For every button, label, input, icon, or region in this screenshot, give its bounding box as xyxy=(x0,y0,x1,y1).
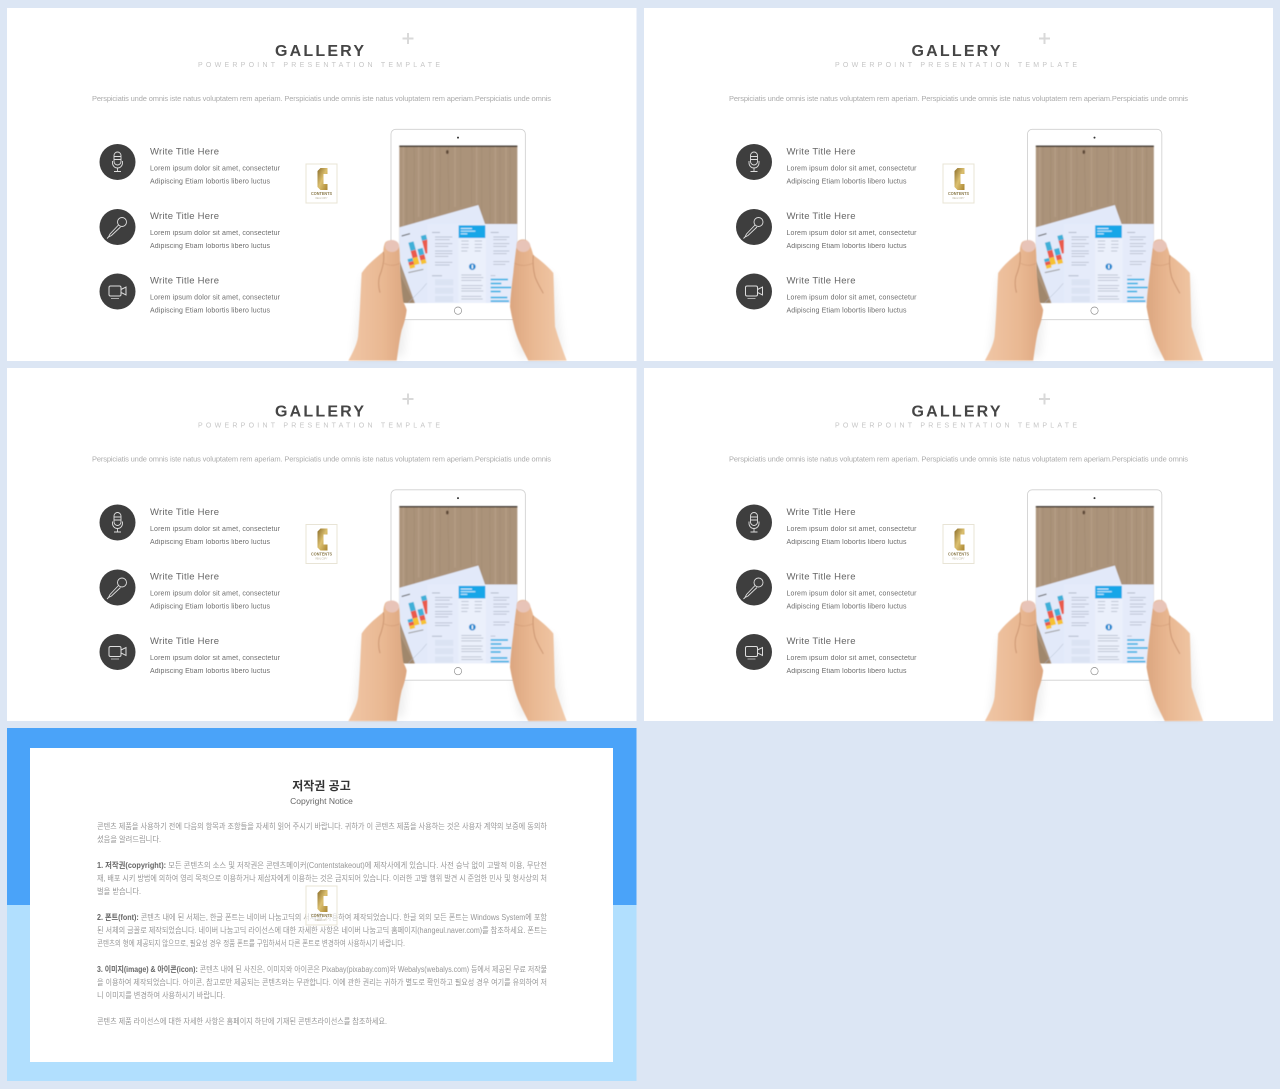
subtitle: POWERPOINT PRESENTATION TEMPLATE xyxy=(835,62,1077,69)
notice body text: 1. 저작권(copyright): 모든 콘텐츠의 소스 및 저작권은 콘텐츠메이커(Contentstakeout)에 제작사에게 있습니다. 사전 승낙 없이 고발적 이용, 무단전 xyxy=(97,860,547,870)
item 1: Adipiscing Etiam lobortis libero luctus xyxy=(786,539,907,546)
item 3: Write Title Here xyxy=(786,636,856,647)
plus decoration xyxy=(1039,394,1050,404)
item 3: Lorem ipsum dolor sit amet, consectetur xyxy=(150,294,281,302)
item 1: Lorem ipsum dolor sit amet, consectetur xyxy=(786,166,917,172)
watermark logo xyxy=(306,524,337,564)
notice body text: 니 이미지를 변경하여 사용하시기 바랍니다. xyxy=(97,990,225,1000)
item 3: Adipiscing Etiam lobortis libero luctus xyxy=(150,308,270,314)
item 2: Write Title Here xyxy=(786,572,856,582)
watermark logo: REAL COPY xyxy=(316,919,328,922)
item 3: Write Title Here xyxy=(150,276,219,286)
notice body text: 2. 폰트(font): 콘텐츠 내에 된 서체는, 한글 폰트는 네이버 나눔고딕의 서체를 사용하여 제작되었습니다. 한글 외의 모든 폰트는 Windows System에 포함 xyxy=(97,912,548,922)
item 3: Adipiscing Etiam lobortis libero luctus xyxy=(786,668,907,675)
panel: slide 1 xyxy=(7,8,636,361)
item 1: Adipiscing Etiam lobortis libero luctus xyxy=(150,178,270,186)
watermark logo xyxy=(943,164,974,203)
item 2 xyxy=(736,209,917,250)
intro text: Perspiciatis unde omnis iste natus voluptatem rem aperiam. Perspiciatis unde omnis iste natus voluptatem rem aperiam.Perspiciatis unde omnis xyxy=(729,94,1188,103)
watermark logo xyxy=(943,524,974,564)
item 1: Write Title Here xyxy=(150,507,219,518)
notice body text: 을 이용하여 제작되었습니다. 아이콘, 참고로만 제공되는 콘텐츠와는 무관합니다. 이에 관한 권리는 귀하가 별도로 확인하고 필요성 경우 여기를 유의하여 저 xyxy=(97,977,547,987)
watermark logo: REAL COPY xyxy=(952,197,965,200)
item 1: Adipiscing Etiam lobortis libero luctus xyxy=(150,539,270,546)
item 3: Lorem ipsum dolor sit amet, consectetur xyxy=(786,655,917,662)
item 1 xyxy=(100,504,281,546)
item 3 xyxy=(736,634,917,675)
notice body text: 콘텐츠의 형에 제공되지 않으므로, 필요성 경우 정품 폰트를 구입하셔서 다른 폰트로 변경하여 사용하시기 바랍니다. xyxy=(97,938,405,948)
item 1 xyxy=(100,144,281,186)
title: GALLERY xyxy=(912,43,1001,60)
item 2: Adipiscing Etiam lobortis libero luctus xyxy=(786,243,907,250)
panel: copyright notice xyxy=(7,728,636,1081)
item 3: Write Title Here xyxy=(150,636,219,647)
item 3: Lorem ipsum dolor sit amet, consectetur xyxy=(150,655,281,662)
item 1 xyxy=(736,504,917,546)
item 2: Write Title Here xyxy=(150,572,219,582)
item 2: Lorem ipsum dolor sit amet, consectetur xyxy=(786,590,917,598)
plus decoration xyxy=(402,33,414,44)
copyright heading: 저작권 공고 xyxy=(292,778,351,793)
panel: slide 4 xyxy=(644,368,1273,721)
tablet held in hands xyxy=(985,490,1203,721)
item 1: Lorem ipsum dolor sit amet, consectetur xyxy=(150,166,281,172)
tablet held in hands xyxy=(348,490,567,721)
item 3: Adipiscing Etiam lobortis libero luctus xyxy=(150,668,270,675)
notice body text: 된 서체의 글꼴로 제작되었습니다. 네이버 나눔고딕 라이선스에 대한 자세한 사항은 네이버 나눔고딕 홈페이지(hangeul.naver.com)를 참조하세요. 폰트는 xyxy=(97,925,547,935)
watermark logo: REAL COPY xyxy=(316,197,328,200)
panel: slide 3 xyxy=(7,368,636,721)
notice body text: 재, 배포 시키 방법에 의하여 영리 목적으로 이용하거나 제삼자에게 이용하는 것은 금지되어 있습니다. 이러한 고발 행위 발견 시 준엄한 민사 및 형사상의 처 xyxy=(97,873,547,883)
title: GALLERY xyxy=(275,43,364,60)
item 2: Write Title Here xyxy=(150,211,219,222)
plus decoration xyxy=(1039,33,1050,44)
item 1: Write Title Here xyxy=(150,146,219,158)
copyright subheading: Copyright Notice xyxy=(290,796,353,806)
subtitle: POWERPOINT PRESENTATION TEMPLATE xyxy=(198,422,440,430)
notice body text: 셨음을 알려드립니다. xyxy=(97,834,161,844)
title: GALLERY xyxy=(275,404,364,420)
item 1: Adipiscing Etiam lobortis libero luctus xyxy=(786,178,907,186)
watermark logo: REAL COPY xyxy=(316,558,328,560)
watermark logo: CONTENTS xyxy=(948,191,969,196)
item 1 xyxy=(736,144,917,186)
notice body text: 콘텐츠 제품 라이선스에 대한 자세한 사항은 홈페이지 하단에 기재된 콘텐츠라이선스를 참조하세요. xyxy=(97,1016,387,1026)
notice body text: 3. 이미지(image) & 아이콘(icon): 콘텐츠 내에 된 사진은, 이미지와 아이콘은 Pixabay(pixabay.com)와 Webalys(webalys.com) 등에서 제공된 무료 저작물 xyxy=(97,964,547,974)
tablet held in hands xyxy=(985,129,1203,361)
item 3 xyxy=(100,274,281,314)
notice body text xyxy=(97,821,548,1026)
item 1: Lorem ipsum dolor sit amet, consectetur xyxy=(786,526,917,533)
watermark logo: REAL COPY xyxy=(952,558,965,560)
item 2 xyxy=(100,570,281,610)
plus decoration xyxy=(402,394,414,404)
watermark logo xyxy=(306,886,337,925)
item 2: Adipiscing Etiam lobortis libero luctus xyxy=(150,243,270,250)
item 2: Adipiscing Etiam lobortis libero luctus xyxy=(786,604,907,610)
item 2 xyxy=(100,209,281,250)
item 3: Lorem ipsum dolor sit amet, consectetur xyxy=(786,294,917,302)
notice body text: 콘텐츠 제품을 사용하기 전에 다음의 항목과 조항들을 자세히 읽어 주시기 바랍니다. 귀하가 이 콘텐츠 제품을 사용하는 것은 사용자 계약의 보증에 동의하 xyxy=(97,821,548,831)
watermark logo: CONTENTS xyxy=(948,552,969,556)
intro text: Perspiciatis unde omnis iste natus voluptatem rem aperiam. Perspiciatis unde omnis iste natus voluptatem rem aperiam.Perspiciatis unde omnis xyxy=(92,94,551,103)
intro text: Perspiciatis unde omnis iste natus voluptatem rem aperiam. Perspiciatis unde omnis iste natus voluptatem rem aperiam.Perspiciatis unde omnis xyxy=(92,454,551,464)
subtitle: POWERPOINT PRESENTATION TEMPLATE xyxy=(835,422,1077,430)
item 3 xyxy=(736,274,917,314)
item 1: Write Title Here xyxy=(786,146,856,158)
item 2: Lorem ipsum dolor sit amet, consectetur xyxy=(150,230,281,237)
item 2: Write Title Here xyxy=(786,211,856,222)
item 1: Write Title Here xyxy=(786,507,856,518)
watermark logo xyxy=(306,164,337,203)
item 1: Lorem ipsum dolor sit amet, consectetur xyxy=(150,526,281,533)
watermark logo: CONTENTS xyxy=(311,552,332,556)
notice body text: 벌을 받습니다. xyxy=(97,886,141,896)
title: GALLERY xyxy=(912,404,1001,420)
panel: slide 2 xyxy=(644,8,1273,361)
watermark logo: CONTENTS xyxy=(311,191,332,196)
item 2: Lorem ipsum dolor sit amet, consectetur xyxy=(150,590,281,598)
watermark logo: CONTENTS xyxy=(311,913,332,918)
item 3 xyxy=(100,634,281,675)
subtitle: POWERPOINT PRESENTATION TEMPLATE xyxy=(198,62,440,69)
item 2: Adipiscing Etiam lobortis libero luctus xyxy=(150,604,270,610)
item 2: Lorem ipsum dolor sit amet, consectetur xyxy=(786,230,917,237)
item 3: Write Title Here xyxy=(786,276,856,286)
tablet held in hands xyxy=(348,129,567,361)
intro text: Perspiciatis unde omnis iste natus voluptatem rem aperiam. Perspiciatis unde omnis iste natus voluptatem rem aperiam.Perspiciatis unde omnis xyxy=(729,454,1188,464)
item 3: Adipiscing Etiam lobortis libero luctus xyxy=(786,308,907,314)
item 2 xyxy=(736,570,917,610)
